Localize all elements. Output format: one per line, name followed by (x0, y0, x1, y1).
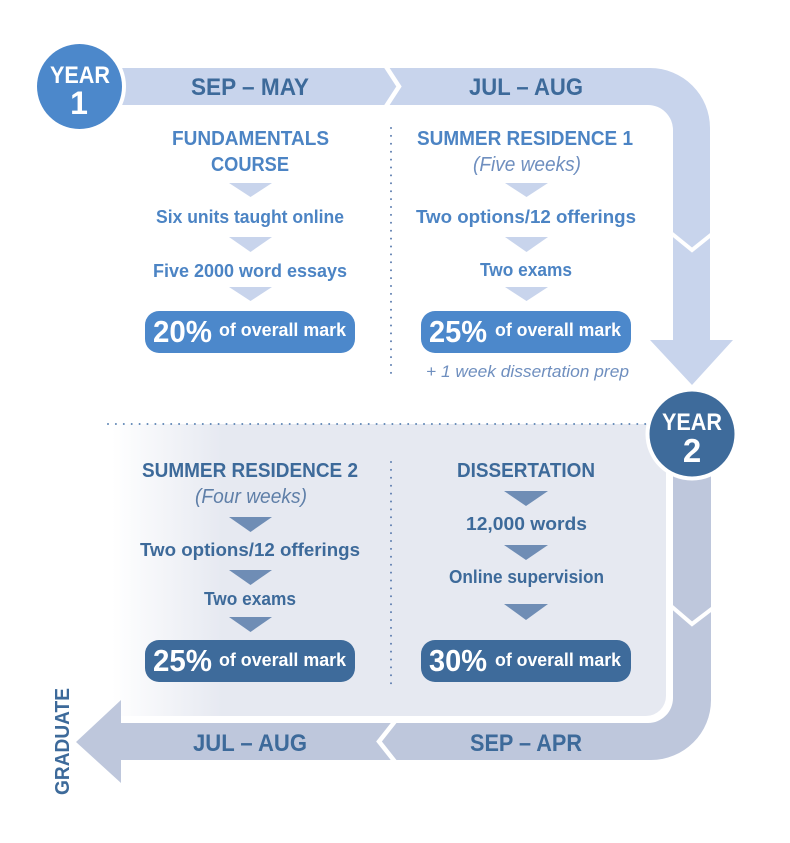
panel: dissertation: Online supervision (449, 567, 604, 587)
band label: Sep-Apr: SEP – APR (470, 730, 582, 757)
graduate label: GRADUATE (52, 688, 74, 795)
panel: dissertation: 12,000 words (466, 514, 587, 534)
panel: fundamentals course: COURSE (211, 154, 289, 176)
panel: dissertation: DISSERTATION (457, 460, 595, 482)
band label: Jul-Aug year 1: JUL – AUG (469, 74, 583, 101)
panel: fundamentals course: 20% (153, 314, 212, 349)
panel: dissertation: 30% (429, 643, 487, 678)
panel: summer residence 2: 25% (153, 643, 212, 678)
panel: fundamentals course: FUNDAMENTALS (172, 128, 329, 150)
band label: Sep-May: SEP – MAY (191, 74, 309, 101)
panel: fundamentals course: Five 2000 word essays (153, 261, 347, 281)
panel: summer residence 2 (140, 460, 360, 682)
panel: summer residence 2: SUMMER RESIDENCE 2 (142, 460, 358, 482)
panel: summer residence 1: SUMMER RESIDENCE 1 (417, 128, 633, 150)
year 2 badge: 2 (683, 432, 701, 469)
panel: summer residence 2: of overall mark (219, 650, 347, 670)
year 1 badge: 1 (70, 85, 88, 121)
panel: summer residence 1: Two exams (480, 260, 572, 280)
arrow: year 2 band (76, 470, 713, 783)
panel: summer residence 1: (Five weeks) (473, 154, 581, 176)
panel: summer residence 2: Two exams (204, 589, 296, 609)
panel: dissertation: of overall mark (495, 650, 622, 670)
panel: summer residence 1: + 1 week dissertation prep (426, 362, 629, 381)
panel: summer residence 1: 25% (429, 314, 487, 349)
year 2 badge (646, 388, 738, 480)
panel: summer residence 1: Two options/12 offerings (416, 207, 636, 227)
panel: summer residence 1 (416, 128, 636, 381)
arrow: year 1 band (100, 65, 733, 385)
panel: year 2 background (108, 424, 666, 716)
band label: Jul-Aug year 2: JUL – AUG (193, 730, 307, 757)
year 1 badge (33, 40, 126, 133)
panel: dissertation (421, 460, 631, 682)
divider lines (108, 128, 650, 686)
year 2 badge: YEAR (662, 409, 722, 436)
panel: fundamentals course: Six units taught online (156, 207, 344, 227)
panel: fundamentals course: of overall mark (219, 320, 347, 340)
panel: summer residence 1: of overall mark (495, 320, 622, 340)
panel: summer residence 2: Two options/12 offerings (140, 540, 360, 560)
panel: summer residence 2: (Four weeks) (195, 486, 307, 508)
year 1 badge: YEAR (50, 62, 110, 89)
panel: fundamentals course (145, 128, 355, 353)
